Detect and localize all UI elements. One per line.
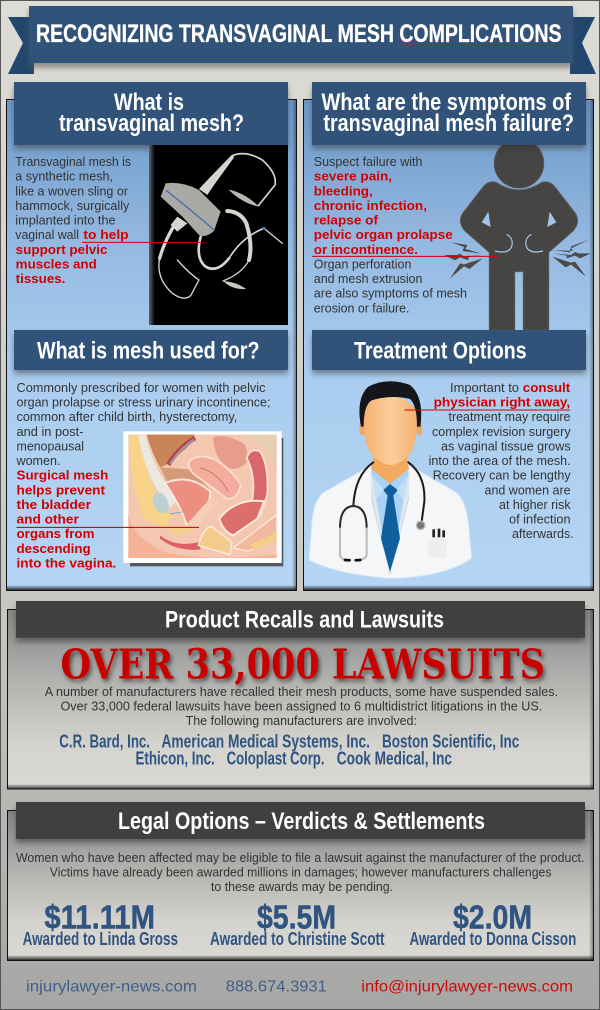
text: mesh usage description: the bladder <box>16 498 91 512</box>
text: symptoms description: Suspect failure with <box>314 155 422 169</box>
text: treatment description: and women are <box>484 483 571 497</box>
text: symptoms description: erosion or failure. <box>314 301 410 315</box>
list: manufacturers: Boston Scientific, Inc <box>382 732 519 752</box>
text: what is mesh description: Transvaginal mesh is <box>15 155 131 169</box>
text: mesh usage description: organ prolapse or stress urinary incontinence; <box>16 396 270 410</box>
text: symptoms description: relapse of <box>314 214 379 228</box>
text: symptoms description: or incontinence. <box>314 243 418 257</box>
text: what is mesh description <box>15 155 201 286</box>
heading: product recalls: Product Recalls and Lawsuits <box>165 607 444 634</box>
list: manufacturers: Ethicon, Inc. <box>136 748 215 768</box>
panel: legal options <box>8 802 594 960</box>
list: manufacturers: C.R. Bard, Inc. <box>59 732 150 752</box>
text: mesh usage description: into the vagina. <box>16 556 116 570</box>
heading: what is transvaginal mesh: What is <box>114 89 184 116</box>
text: treatment description: of infection <box>509 513 571 527</box>
panel: product recalls and lawsuits <box>8 601 594 789</box>
stat: linda gross award <box>23 898 178 949</box>
stat: christine scott award <box>210 898 385 949</box>
heading: product recalls <box>16 601 585 642</box>
text: what is mesh description: vaginal wall <box>15 228 79 242</box>
text: mesh usage description: descending <box>16 542 91 556</box>
heading: what is transvaginal mesh: transvaginal mesh? <box>59 110 244 137</box>
text: recalls description: A number of manufacturers have recalled their mesh products, some have suspended sales. <box>45 685 558 699</box>
text: what is mesh description: like a woven sling or <box>15 184 128 198</box>
text: symptoms description: severe pain, <box>314 170 392 184</box>
text: treatment description: afterwards. <box>512 527 574 541</box>
text: symptoms description: are also symptoms of mesh <box>314 287 467 301</box>
heading: legal options: Legal Options – Verdicts & Settlements <box>118 808 485 835</box>
stat: linda gross award: $11.11M <box>44 898 155 935</box>
text: treatment description: complex revision surgery <box>432 425 571 439</box>
text: treatment description <box>404 381 574 541</box>
text: legal description: Women who have been affected may be eligible to file a lawsuit against the manufacturer of the product. <box>16 851 584 865</box>
text: symptoms description: pelvic organ prolapse <box>314 228 453 242</box>
text: what is mesh description: a synthetic mesh, <box>15 170 113 184</box>
text: recalls description: Over 33,000 federal lawsuits have been assigned to 6 multidistrict litigations in the US. <box>60 700 542 714</box>
image: mesh implant on black <box>149 145 288 325</box>
title banner <box>8 6 596 74</box>
footer contact details <box>26 979 573 996</box>
footer contact details: 888.674.3931 <box>226 979 327 996</box>
stat: linda gross award: Awarded to Linda Gross <box>23 929 178 949</box>
text: what is mesh description: tissues. <box>16 272 65 286</box>
text: mesh usage description: helps prevent <box>16 483 106 497</box>
icon: figure in pain <box>444 139 591 330</box>
list: manufacturers <box>59 732 519 768</box>
text: symptoms description: chronic infection, <box>314 199 427 213</box>
stat: christine scott award: Awarded to Christine Scott <box>210 929 385 949</box>
image: pelvic anatomy illustration <box>123 431 283 566</box>
icon: doctor illustration <box>309 381 472 578</box>
text: mesh usage description: menopausal <box>16 440 84 454</box>
list: manufacturers: Cook Medical, Inc <box>337 748 452 768</box>
panel: what is mesh and uses <box>6 82 296 590</box>
text: legal description: to these awards may be pending. <box>211 880 393 894</box>
text: treatment description: into the area of the mesh. <box>429 454 571 468</box>
text: recalls description: The following manufacturers are involved: <box>186 714 417 728</box>
text: symptoms description <box>312 155 497 315</box>
heading: what is mesh used for: What is mesh used for? <box>37 337 260 364</box>
list: manufacturers: American Medical Systems, Inc. <box>162 732 370 752</box>
text: mesh usage description: and in post- <box>16 425 84 439</box>
stat: christine scott award: $5.5M <box>257 898 336 935</box>
heading: legal options <box>16 802 585 843</box>
footer contact details: info@injurylawyer-news.com <box>361 979 573 996</box>
footer contact details: injurylawyer-news.com <box>26 979 197 996</box>
heading: treatment options <box>312 330 586 374</box>
text: symptoms description: Organ perforation <box>314 258 411 272</box>
text: mesh usage description: common after child birth, hysterectomy, <box>16 410 237 424</box>
text: treatment description: at higher risk <box>499 498 571 512</box>
text: what is mesh description: to help <box>83 228 129 242</box>
stat: donna cisson award: $2.0M <box>453 898 532 935</box>
text: treatment description: Important to <box>450 381 519 395</box>
text: what is mesh description: implanted into the <box>15 214 116 228</box>
text: treatment description: physician right away, <box>434 396 570 410</box>
heading: symptoms of mesh failure <box>312 82 586 149</box>
text: mesh usage description: organs from <box>16 527 94 541</box>
text: mesh usage description: Commonly prescribed for women with pelvic <box>16 381 266 395</box>
text: recalls description <box>45 685 558 728</box>
text: treatment description: Recovery can be lengthy <box>433 469 571 483</box>
heading: what is transvaginal mesh <box>14 82 288 149</box>
stat: donna cisson award <box>410 898 576 949</box>
text: mesh usage description: Surgical mesh <box>16 469 108 483</box>
text: treatment description: as vaginal tissue grows <box>441 440 571 454</box>
panel: symptoms and treatment <box>304 82 594 590</box>
text: what is mesh description: hammock, surgically <box>15 199 130 213</box>
text: legal description <box>16 851 584 894</box>
text: mesh usage description: and other <box>16 513 79 527</box>
text: legal description: Victims have already been awarded millions in damages; however manufacturers challenges <box>50 866 552 880</box>
text: symptoms description: and mesh extrusion <box>314 272 422 286</box>
text: what is mesh description: muscles and <box>16 258 97 272</box>
text: mesh usage description: women. <box>16 454 60 468</box>
text: treatment description: treatment may require <box>448 410 570 424</box>
text: symptoms description: bleeding, <box>314 184 373 198</box>
text: what is mesh description: support pelvic <box>16 243 108 257</box>
heading: what is mesh used for <box>14 330 288 374</box>
text: mesh usage description <box>16 381 271 570</box>
heading: treatment options: Treatment Options <box>354 337 527 364</box>
list: manufacturers: Coloplast Corp. <box>227 748 324 768</box>
text: treatment description: consult <box>523 381 571 395</box>
